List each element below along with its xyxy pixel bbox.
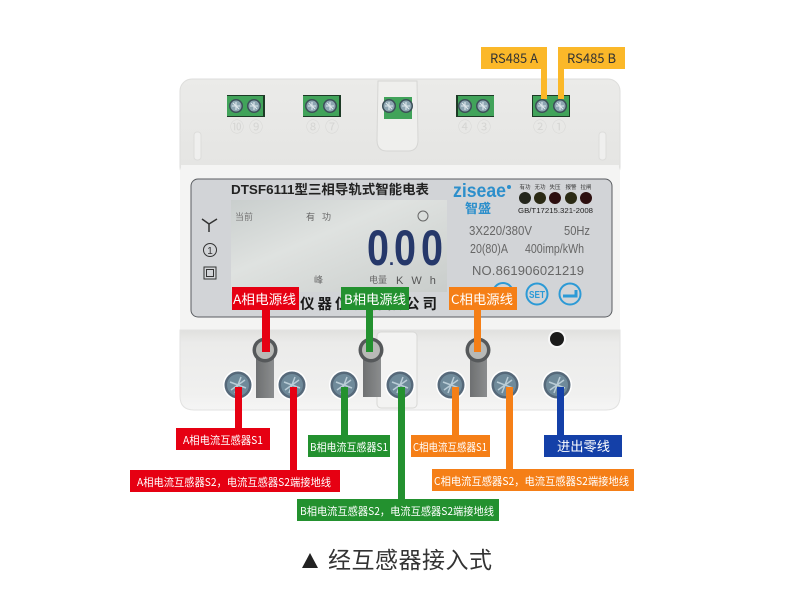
meter specifications: 400imp/kWh [525,242,584,256]
top terminals [227,81,570,151]
brand logo [453,179,511,216]
callout: B phase power line [341,287,409,352]
callout: RS485 B: RS485 B [567,48,616,67]
panel buttons: SET [529,290,545,301]
terminal numbers: ⑩ [230,119,244,135]
LCD reading [367,220,443,276]
callout: A phase CT S1: A相电流互感器S1 [183,432,263,448]
company name: 仪器仪表有限公司 [300,295,440,313]
callout: B phase CT S2 [297,387,499,521]
meter specifications [469,224,590,278]
callout: C phase CT S1 [411,387,490,457]
LCD screen: 有功 [306,211,338,222]
indicator lamps [518,183,593,215]
callout: B phase power line: B相电源线 [344,289,406,308]
LCD reading: 0 [421,220,443,276]
indicator lamps: 无功 [534,183,546,191]
meter specifications: 3X220/380V [469,224,533,238]
meter specifications: NO.861906021219 [472,263,584,278]
panel buttons [493,283,580,304]
callout: RS485 A: RS485 A [490,48,538,67]
callout: C phase power line: C相电源线 [451,289,513,308]
callout: A phase power line: A相电源线 [233,289,296,308]
callout: B phase CT S1 [308,387,390,457]
LCD reading: . [389,249,394,269]
meter specifications: 50Hz [564,224,590,238]
terminal block 10-9 [227,95,265,117]
terminal numbers: ⑦ [325,119,339,135]
LCD screen: 峰 [314,275,323,285]
LCD screen [231,200,447,292]
terminal numbers: ⑨ [249,119,263,135]
LCD screen: KWh [396,275,444,287]
terminal numbers [230,119,566,135]
left symbols [202,219,217,279]
lower terminal lugs [252,338,490,398]
indicator lamps: 拉闸 [580,183,592,191]
LCD reading: 0 [394,220,416,276]
caption: 经互感器接入式 [328,541,492,575]
meter device [180,79,620,410]
callout: A phase CT S1 [176,387,270,450]
callout: C phase CT S2 [432,387,634,491]
LCD screen: 电量 [369,274,387,285]
terminal numbers: ③ [477,119,491,135]
callout: RS485 A [481,47,547,99]
terminal numbers: ② [533,119,547,135]
model title: DTSF6111型三相导轨式智能电表 [231,182,429,197]
indicator lamps: 报警 [565,183,577,191]
terminal block 8-7 [303,95,341,117]
center clip [377,81,418,151]
terminal block 2-1 [532,95,570,117]
left symbols: 1 [207,246,213,257]
indicator lamps: 有功 [519,183,531,191]
brand logo: 智盛 [465,201,491,216]
LCD screen: 当前 [235,211,253,222]
callout: A phase CT S2 [130,387,340,492]
terminal numbers: ① [552,119,566,135]
meter body [180,165,620,335]
callout: B phase CT S2: B相电流互感器S2，电流互感器S2端接地线 [300,503,494,519]
callout: C phase power line [449,287,517,352]
callout: A phase CT S2: A相电流互感器S2，电流互感器S2端接地线 [137,474,331,490]
indicator lamps: GB/T17215.321-2008 [518,206,593,215]
bottom transparent cover [180,330,620,410]
indicator lamps: 失压 [549,183,561,191]
front panel [191,179,612,317]
callout: neutral line: 进出零线 [557,436,610,455]
brand logo: ziseae [453,179,506,201]
callout: neutral line [544,387,622,457]
terminal block 6-5 [382,97,413,119]
LCD reading: 0 [367,220,389,276]
reset port [548,330,566,348]
callout: RS485 B [558,47,625,99]
callout: C phase CT S2: C相电流互感器S2，电流互感器S2端接地线 [434,473,629,489]
callout: B phase CT S1: B相电流互感器S1 [310,439,388,455]
top transparent cover [180,79,620,179]
terminal block 4-3 [456,95,494,117]
terminal numbers: ⑧ [306,119,320,135]
lower terminal screws [223,370,572,400]
meter specifications: 20(80)A [470,242,509,256]
callout: C phase CT S1: C相电流互感器S1 [413,439,487,455]
terminal numbers: ④ [458,119,472,135]
callout: A phase power line [232,287,299,352]
